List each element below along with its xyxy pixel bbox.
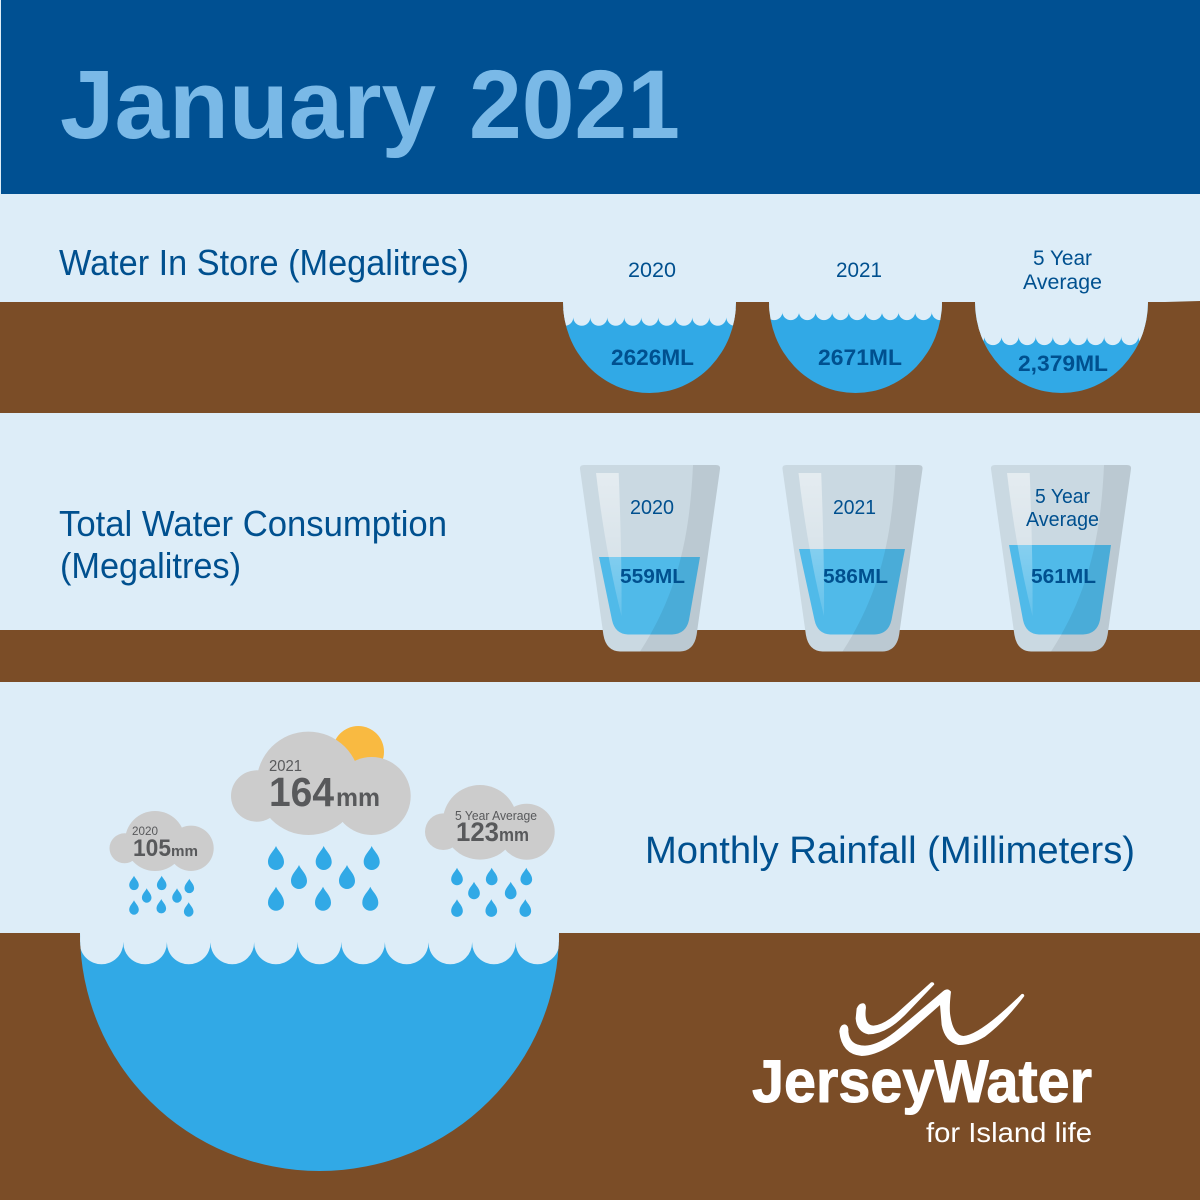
rain cloud 5 year average: mm [499, 825, 529, 845]
reservoir 2020: 2626ML [611, 345, 694, 370]
rain cloud 2021 with sun: mm [336, 784, 380, 812]
icon: waves [839, 982, 1024, 1056]
glass 5 year average: Average [1026, 509, 1099, 531]
logo: Jersey Water [752, 982, 1092, 1148]
ground band [0, 630, 1200, 682]
heading: total water consumption: Total Water Consumption [59, 503, 447, 544]
panel: total water consumption [0, 465, 1200, 682]
glass 2020: 2020 [630, 497, 674, 519]
heading: monthly rainfall: Monthly Rainfall (Millimeters) [645, 830, 1135, 872]
glass 2021: 2021 [833, 497, 876, 519]
glass 5 year average: 561ML [1031, 566, 1096, 588]
glass 2021 [782, 465, 923, 652]
reservoir 2021 [765, 259, 948, 393]
title: January [60, 50, 436, 159]
rain cloud 5 year average: 123 [456, 817, 499, 847]
heading: total water consumption [59, 503, 447, 586]
panel: monthly rainfall [0, 726, 1200, 1200]
rain cloud 5 year average: 5 Year Average [455, 808, 537, 823]
wordmark: JerseyWater [752, 1048, 1092, 1115]
glass 2020: 559ML [620, 566, 685, 588]
reservoir 2020 [556, 259, 743, 393]
tagline: for Island life [926, 1117, 1092, 1148]
rain cloud 5 year average [425, 785, 555, 917]
reservoir 5 year average [975, 250, 1148, 393]
title: 2021 [469, 50, 680, 159]
reservoir 2021: 2671ML [818, 345, 902, 370]
ground band [0, 301, 1200, 413]
header banner [1, 0, 1200, 194]
reservoir 5 year average: 2,379ML [1018, 351, 1108, 376]
rain cloud 2020 [110, 811, 214, 917]
reservoir 5 year average: Average [1023, 271, 1102, 294]
heading: water in store: Water In Store (Megalitres) [59, 242, 469, 283]
reservoir 2021: 2021 [836, 259, 882, 282]
rain cloud 2021 with sun: 164 [269, 769, 334, 815]
panel: water in store [0, 242, 1200, 413]
glass 2021: 586ML [823, 566, 888, 588]
reservoir 5 year average: 5 Year [1033, 247, 1092, 270]
rain cloud 2021 with sun: 2021 [269, 758, 302, 775]
rain cloud 2020: 2020 [132, 824, 158, 838]
title [60, 50, 680, 159]
rain cloud 2021 with sun [231, 726, 411, 911]
heading: total water consumption: (Megalitres) [60, 545, 241, 586]
glass 5 year average [991, 465, 1131, 652]
icon: sun [333, 726, 384, 777]
glass 5 year average: 5 Year [1035, 486, 1090, 508]
glass 2020 [580, 465, 720, 652]
ground band [0, 933, 1200, 1200]
rain cloud 2020: 105 [133, 835, 171, 862]
large reservoir [78, 921, 562, 1171]
rain cloud 2020: mm [171, 843, 198, 860]
reservoir 2020: 2020 [628, 259, 676, 282]
